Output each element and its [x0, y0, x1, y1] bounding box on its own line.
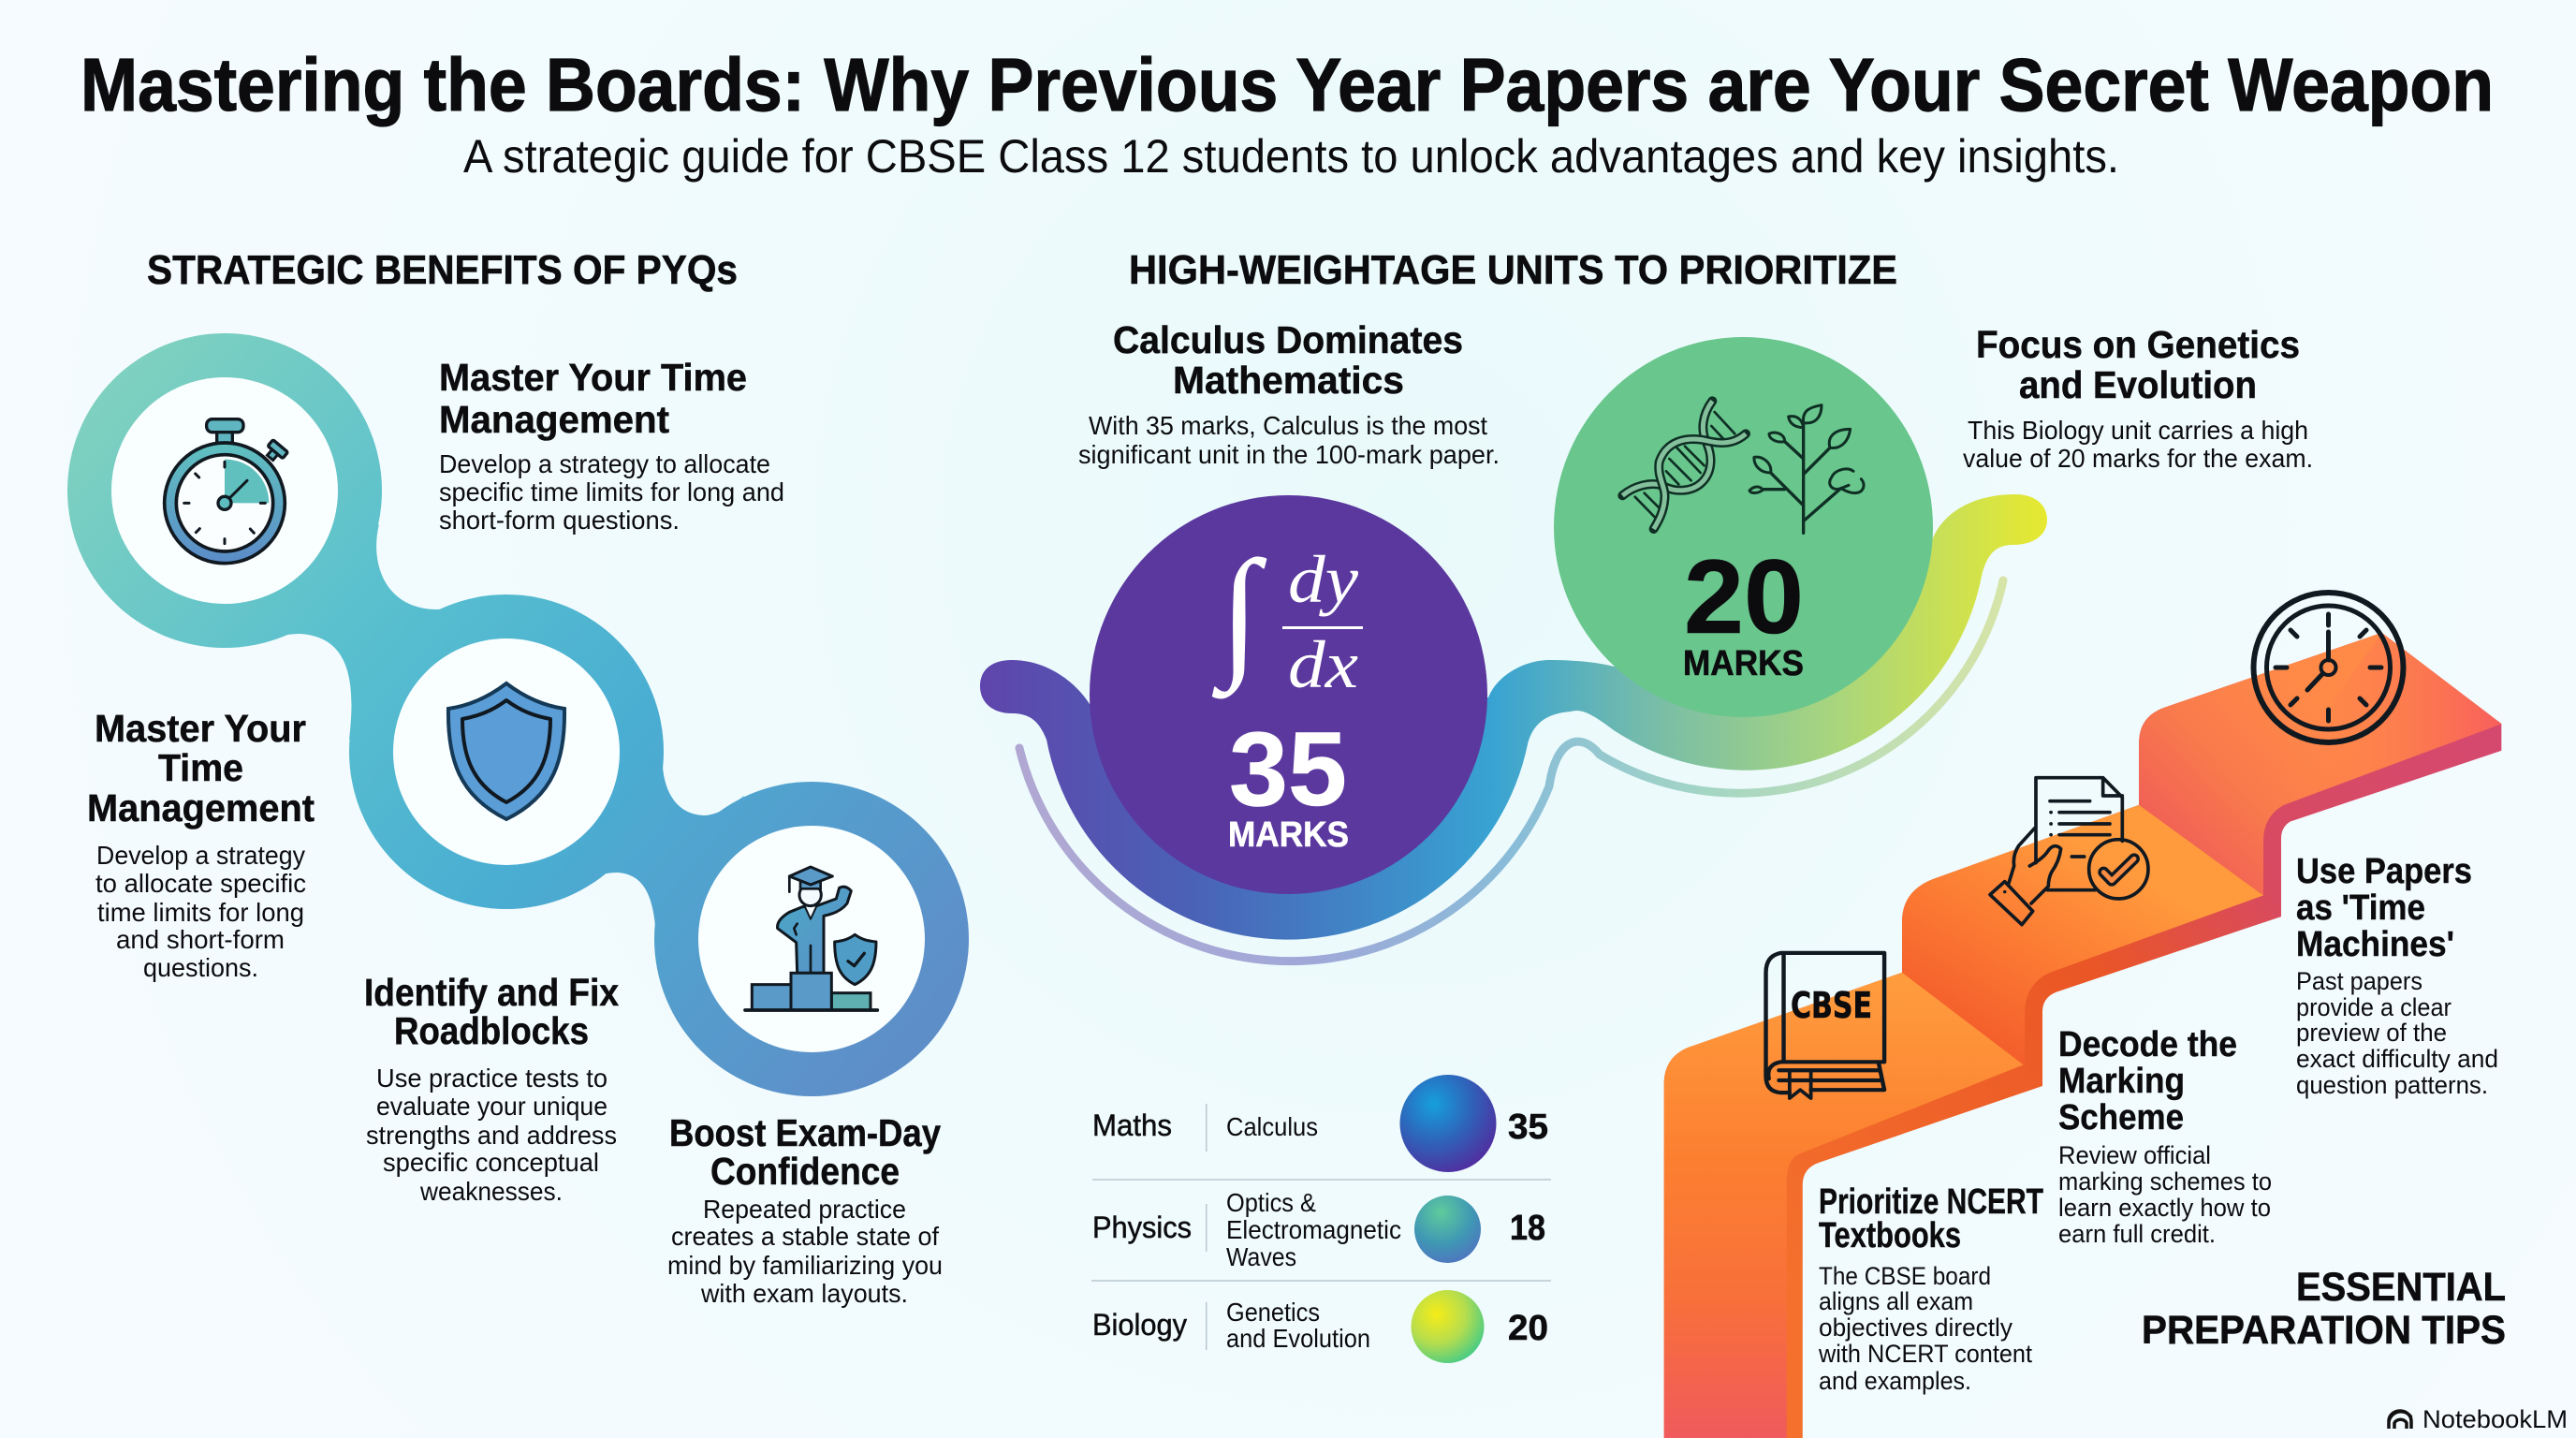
benefit: master your time management (left): and short-form — [116, 925, 285, 954]
icon: graduate on podium — [745, 867, 877, 1010]
row: biology: Genetics — [1226, 1298, 1320, 1327]
tip: prioritize NCERT textbooks: aligns all exam — [1819, 1287, 1973, 1315]
benefit: identify and fix roadblocks — [364, 971, 619, 1206]
tip: use papers as time machines: question patterns. — [2296, 1071, 2488, 1099]
benefit: boost exam-day confidence: Boost Exam-Day — [669, 1111, 941, 1154]
row: physics: 18 — [1510, 1209, 1545, 1248]
thin outline curve — [1019, 580, 2003, 961]
icon: CBSE book — [1766, 953, 1884, 1098]
row: biology: Biology — [1092, 1308, 1187, 1342]
value: 35 marks: MARKS — [1228, 815, 1349, 855]
benefit: boost exam-day confidence: Repeated practice — [703, 1195, 906, 1224]
benefit: master your time management (right): Master Your Time — [439, 356, 747, 399]
row: maths: 35 — [1508, 1108, 1548, 1147]
row: physics — [1092, 1188, 1545, 1271]
tip: prioritize NCERT textbooks: and examples. — [1819, 1367, 1971, 1395]
benefit: master your time management (left): to allocate specific — [95, 869, 306, 898]
integral formula — [1212, 531, 1363, 702]
benefit: boost exam-day confidence: creates a stable state of — [671, 1222, 939, 1251]
benefit: master your time management (left): questions. — [143, 953, 258, 982]
row: physics: Physics — [1092, 1211, 1192, 1244]
callout: calculus dominates mathematics: significant unit in the 100-mark paper. — [1078, 440, 1500, 469]
tip: prioritize NCERT textbooks: Textbooks — [1819, 1216, 1961, 1255]
benefit: master your time management (right): Management — [439, 398, 669, 441]
callout: focus on genetics and evolution: Focus on Genetics — [1976, 323, 2300, 366]
callout: calculus dominates mathematics: Calculus Dominates — [1113, 318, 1463, 361]
tip: decode the marking scheme — [2058, 1025, 2272, 1248]
tip: decode the marking scheme: learn exactly how to — [2058, 1194, 2271, 1222]
tip: use papers as time machines: Use Papers — [2296, 852, 2472, 891]
row: maths: Maths — [1092, 1108, 1172, 1142]
panel: high-weightage units — [980, 247, 2313, 1363]
value: 35 marks: 35 — [1229, 711, 1347, 828]
row: physics: Waves — [1226, 1242, 1296, 1271]
benefit: master your time management (left): Management — [87, 786, 315, 829]
row: physics: Electromagnetic — [1226, 1215, 1401, 1244]
chain of three rings — [67, 333, 969, 1096]
tip: use papers as time machines: provide a clear — [2296, 993, 2452, 1021]
benefit: identify and fix roadblocks: Use practice tests to — [376, 1064, 607, 1093]
integral formula: dy — [1288, 542, 1358, 617]
tip: prioritize NCERT textbooks: Prioritize NCERT — [1819, 1182, 2043, 1222]
heading: essential preparation tips: PREPARATION TIPS — [2142, 1308, 2506, 1353]
callout: calculus dominates mathematics — [1078, 318, 1500, 469]
heading: strategic benefits: STRATEGIC BENEFITS OF PYQs — [147, 247, 738, 293]
value: 20 marks: 20 — [1684, 538, 1804, 655]
integral formula: dx — [1288, 627, 1358, 702]
tip: decode the marking scheme: Scheme — [2058, 1098, 2184, 1137]
heading: high-weightage units: HIGH-WEIGHTAGE UNITS TO PRIORITIZE — [1129, 247, 1897, 293]
panel: essential preparation tips — [1664, 593, 2506, 1438]
callout: focus on genetics and evolution — [1963, 323, 2313, 473]
benefit: master your time management (right) — [439, 356, 784, 535]
benefit: identify and fix roadblocks: Roadblocks — [394, 1009, 589, 1052]
tip: decode the marking scheme: Marking — [2058, 1062, 2185, 1101]
benefit: identify and fix roadblocks: strengths and address — [366, 1121, 617, 1150]
circle: genetics 20 marks — [1554, 337, 1933, 717]
icon: marking scheme paper and hand — [1990, 778, 2148, 925]
subtitle: A strategic guide for CBSE Class 12 students to unlock advantages and key insights. — [463, 130, 2119, 183]
benefit: master your time management (right): short-form questions. — [439, 506, 680, 535]
row: biology: 20 — [1508, 1309, 1548, 1348]
integral formula: ∫ — [1212, 531, 1267, 699]
benefit: identify and fix roadblocks: weaknesses. — [419, 1177, 563, 1206]
logo: NotebookLM: NotebookLM — [2422, 1405, 2568, 1433]
value: 20 marks: MARKS — [1683, 644, 1804, 683]
orange staircase — [1664, 633, 2501, 1438]
tip: prioritize NCERT textbooks: with NCERT content — [1818, 1340, 2032, 1368]
benefit: master your time management (left): Develop a strategy — [96, 841, 305, 870]
ribbon wave behind marks circles — [980, 494, 2047, 940]
row: biology — [1092, 1290, 1548, 1363]
tip: use papers as time machines: preview of the — [2296, 1019, 2447, 1047]
benefit: master your time management (right): specific time limits for long and — [439, 477, 784, 506]
tip: use papers as time machines: Past papers — [2296, 967, 2422, 995]
tip: decode the marking scheme: Decode the — [2058, 1025, 2237, 1064]
circle: calculus 35 marks — [1090, 495, 1487, 894]
heading: essential preparation tips: ESSENTIAL — [2296, 1265, 2506, 1310]
benefit: master your time management (left) — [87, 707, 315, 982]
tip: decode the marking scheme: Review official — [2058, 1141, 2211, 1169]
icon: DNA helix — [1622, 401, 1746, 529]
table: subject weightage — [1091, 1075, 1551, 1363]
icon: clock — [2254, 593, 2404, 742]
tip: prioritize NCERT textbooks: objectives directly — [1819, 1313, 2012, 1342]
callout: focus on genetics and evolution: This Biology unit carries a high — [1968, 416, 2308, 445]
benefit: boost exam-day confidence: with exam layouts. — [700, 1279, 908, 1308]
row: maths — [1092, 1075, 1548, 1172]
callout: calculus dominates mathematics: Mathematics — [1173, 359, 1404, 402]
benefit: master your time management (left): Master Your — [95, 707, 306, 750]
icon: shield — [448, 683, 564, 819]
panel: strategic benefits of PYQs — [67, 247, 969, 1308]
benefit: master your time management (left): Time — [158, 746, 243, 789]
row: maths: Calculus — [1226, 1112, 1318, 1141]
tip: decode the marking scheme: marking schemes to — [2058, 1167, 2272, 1196]
tip: use papers as time machines: as 'Time — [2296, 888, 2425, 928]
icon: stopwatch — [165, 419, 287, 564]
callout: calculus dominates mathematics: With 35 marks, Calculus is the most — [1089, 411, 1487, 440]
tip: decode the marking scheme: earn full credit. — [2058, 1220, 2216, 1248]
tip: use papers as time machines: exact difficulty and — [2296, 1045, 2498, 1073]
benefit: boost exam-day confidence — [667, 1111, 943, 1308]
tip: use papers as time machines: Machines' — [2296, 925, 2454, 964]
heading: essential preparation tips — [2142, 1265, 2506, 1353]
tip: use papers as time machines — [2296, 852, 2498, 1099]
tip: prioritize NCERT textbooks — [1818, 1182, 2043, 1395]
row: biology: and Evolution — [1226, 1324, 1370, 1353]
benefit: identify and fix roadblocks: evaluate your unique — [376, 1092, 607, 1121]
row: physics: Optics & — [1226, 1188, 1316, 1217]
icon: plant — [1749, 405, 1864, 533]
callout: focus on genetics and evolution: and Evolution — [2019, 363, 2257, 406]
benefit: identify and fix roadblocks: specific conceptual — [383, 1148, 599, 1177]
benefit: master your time management (left): time limits for long — [97, 898, 304, 927]
benefit: master your time management (right): Develop a strategy to allocate — [439, 449, 770, 478]
book label: CBSE — [1791, 985, 1872, 1026]
callout: focus on genetics and evolution: value of 20 marks for the exam. — [1963, 444, 2313, 473]
benefit: boost exam-day confidence: mind by familiarizing you — [667, 1251, 943, 1280]
benefit: identify and fix roadblocks: Identify and Fix — [364, 971, 619, 1014]
tip: prioritize NCERT textbooks: The CBSE board — [1819, 1262, 1991, 1290]
benefit: boost exam-day confidence: Confidence — [710, 1150, 900, 1193]
